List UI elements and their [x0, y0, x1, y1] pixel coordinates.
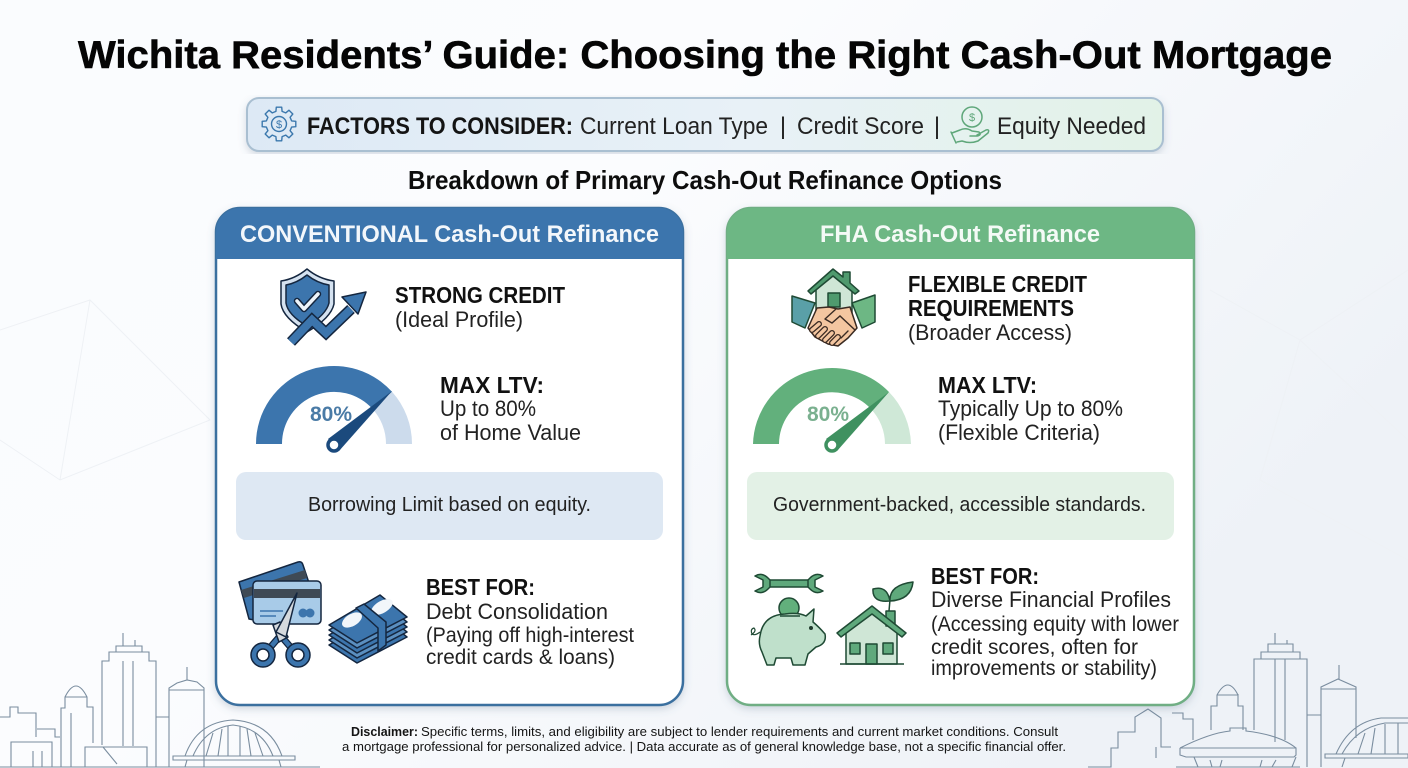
gauge: 80 percent: 80%	[807, 403, 849, 426]
callout: government-backed: Government-backed, accessible standards.	[773, 494, 1146, 516]
wrench	[755, 574, 823, 593]
factor: credit score: Credit Score	[797, 113, 924, 140]
best for text: (Accessing equity with lower	[931, 613, 1179, 636]
disclaimer: Disclaimer:	[351, 725, 418, 739]
flexible credit text: REQUIREMENTS	[908, 295, 1074, 321]
best for text: improvements or stability)	[931, 657, 1157, 680]
gauge: 80 percent	[753, 368, 911, 451]
disclaimer	[342, 725, 1066, 754]
panel: conventional	[216, 208, 683, 705]
fha header	[727, 208, 1194, 259]
max ltv text	[938, 372, 1123, 445]
skyline: right	[1088, 633, 1408, 767]
green house	[837, 582, 913, 664]
separator: |	[780, 113, 786, 140]
flexible credit text: FLEXIBLE CREDIT	[908, 271, 1087, 297]
best for text	[931, 563, 1179, 680]
skyline: left	[0, 633, 320, 767]
gauge: 80 percent	[256, 366, 412, 451]
best for text: (Paying off high-interest	[426, 624, 634, 647]
max ltv text: MAX LTV:	[938, 372, 1037, 398]
cash stack	[329, 595, 407, 663]
icon: hand holding coin	[951, 107, 989, 143]
best for text: Diverse Financial Profiles	[931, 587, 1171, 612]
icon: house and handshake	[792, 269, 875, 346]
conventional header: CONVENTIONAL Cash-Out Refinance	[240, 221, 659, 248]
callout: borrowing limit: Borrowing Limit based on equity.	[308, 494, 591, 516]
factors bar	[247, 98, 1163, 151]
callout: government-backed	[747, 472, 1174, 540]
strong credit text: STRONG CREDIT	[395, 282, 565, 308]
best for text: BEST FOR:	[931, 563, 1039, 589]
icon: shield and rising arrow	[281, 269, 366, 342]
title: Wichita Residents’ Guide: Choosing the Right Cash-Out Mortgage	[78, 34, 1332, 77]
flexible credit text: (Broader Access)	[908, 320, 1072, 345]
callout: borrowing limit	[236, 472, 663, 540]
best for text	[426, 574, 634, 669]
icon: gear with dollar: $	[276, 119, 282, 131]
strong credit text	[395, 282, 565, 332]
panel: fha	[727, 208, 1194, 705]
factor: current loan type: Current Loan Type	[580, 113, 768, 140]
best for text: credit cards & loans)	[426, 646, 615, 669]
icon: cut credit cards and cash	[239, 562, 407, 664]
fha header: FHA Cash-Out Refinance	[820, 221, 1100, 248]
gauge: 80 percent: 80%	[310, 403, 352, 426]
icon: wrench, piggy bank and green house	[751, 574, 913, 665]
max ltv text	[440, 372, 581, 445]
max ltv text: (Flexible Criteria)	[938, 420, 1100, 445]
strong credit text: (Ideal Profile)	[395, 307, 523, 332]
disclaimer: Specific terms, limits, and eligibility are subject to lender requirements and current market conditions. Consult	[421, 725, 1059, 739]
best for text: BEST FOR:	[426, 574, 535, 600]
flexible credit text	[908, 271, 1087, 345]
factor: equity needed: Equity Needed	[997, 113, 1146, 140]
max ltv text: Typically Up to 80%	[938, 396, 1123, 421]
max ltv text: Up to 80%	[440, 396, 536, 421]
factors label: FACTORS TO CONSIDER:	[307, 113, 573, 140]
icon: gear with dollar	[262, 107, 296, 141]
icon: hand holding coin: $	[969, 112, 975, 124]
best for text: Debt Consolidation	[426, 599, 608, 624]
subheading: Breakdown of Primary Cash-Out Refinance Options	[408, 165, 1002, 195]
disclaimer: a mortgage professional for personalized advice. | Data accurate as of general knowledge base, not a specific financial offer.	[342, 740, 1066, 754]
max ltv text: MAX LTV:	[440, 372, 544, 398]
separator: |	[934, 113, 940, 140]
conventional header	[216, 208, 683, 259]
max ltv text: of Home Value	[440, 420, 581, 445]
piggy bank	[751, 598, 825, 665]
best for text: credit scores, often for	[931, 636, 1138, 659]
